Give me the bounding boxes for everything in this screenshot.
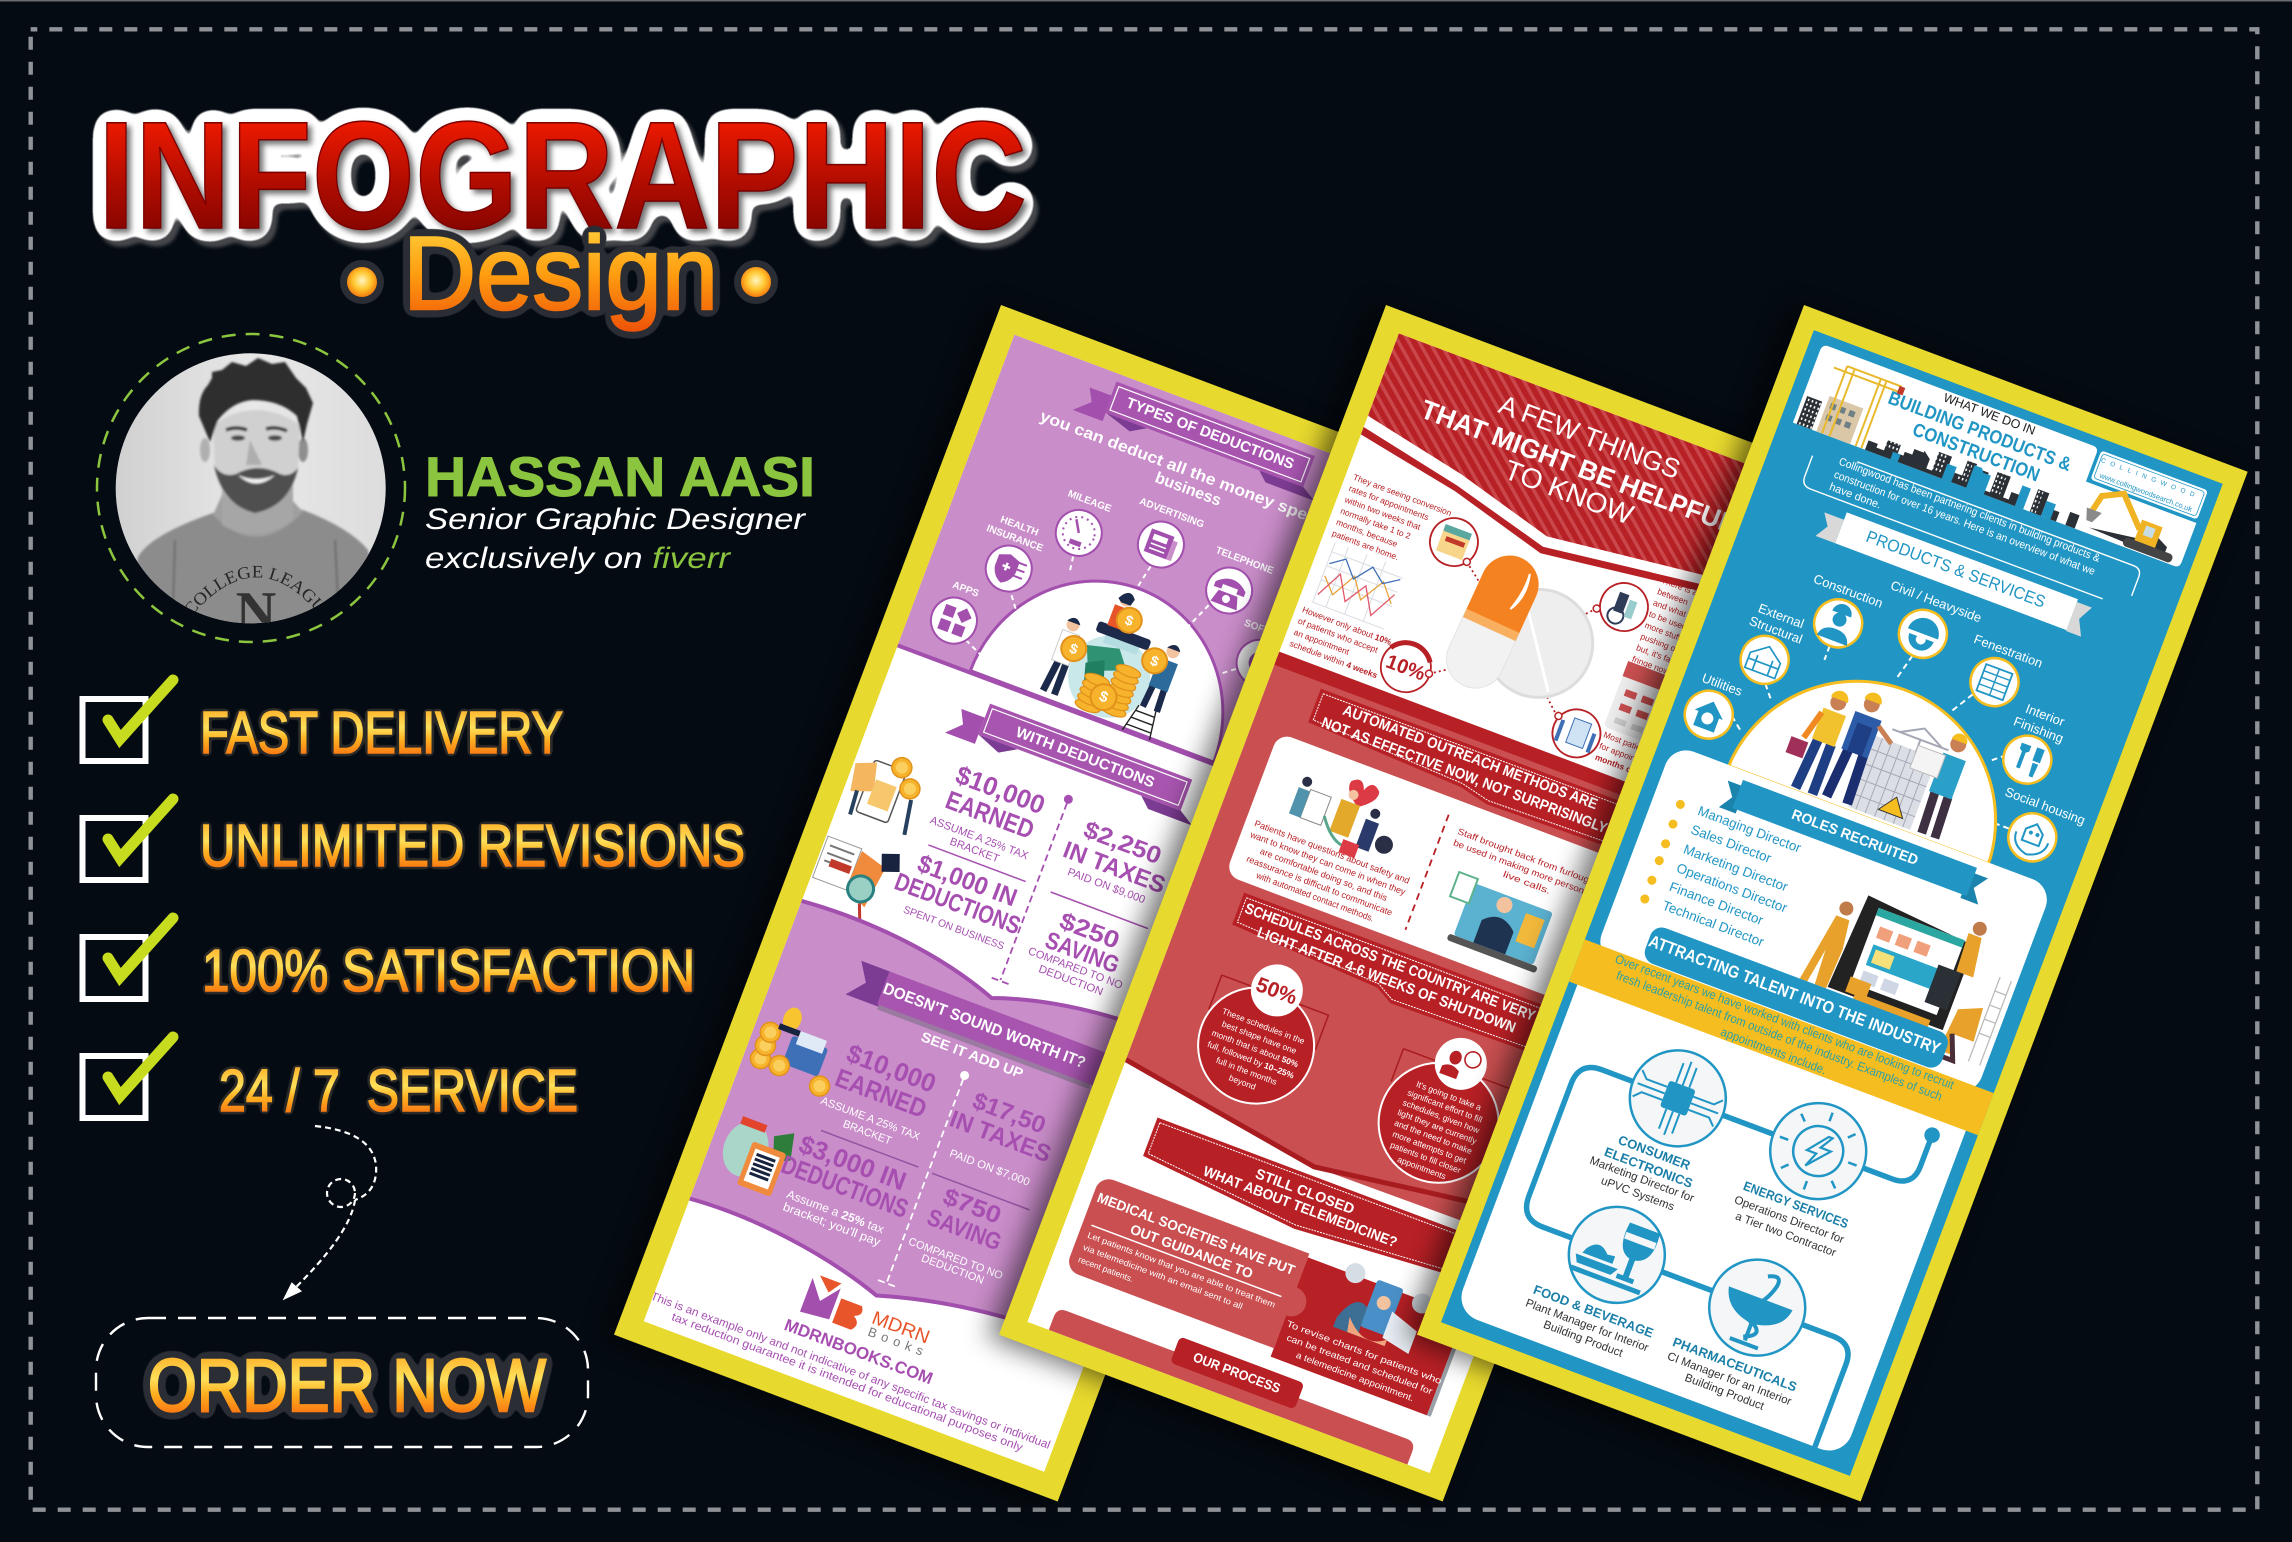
text: patients questions: Patients have questions about safety and [1253, 818, 1411, 886]
icon: fenestration [1964, 651, 2025, 713]
stat: 10 percent: 10% [1383, 651, 1428, 685]
illustration: coins and wallet [746, 999, 852, 1099]
ribbon: TYPES OF DEDUCTIONS [1124, 395, 1296, 473]
stats: taxes and saving [1019, 812, 1178, 1006]
text: right column notes [1594, 575, 1723, 784]
dashed divider [878, 1068, 975, 1286]
node label: pharmaceuticals: CI Manager for an Interior [1665, 1351, 1793, 1408]
icon: health insurance [984, 544, 1033, 593]
checklist [82, 680, 745, 1124]
disclaimer: This is an example only and not indicative of any specific tax savings or individual [649, 1291, 1052, 1452]
icon labels: APPS [951, 580, 981, 600]
stats: earned and deductions: BRACKET [948, 836, 1001, 865]
title: INFOGRAPHIC: INFOGRAPHIC [98, 90, 1027, 261]
icon: tablet [1469, 574, 1608, 713]
designer name and role: Senior Graphic Designer [425, 503, 806, 536]
node label: pharmaceuticals: Building Product [1683, 1372, 1766, 1413]
node label: food and beverage: Plant Manager for Interior [1524, 1297, 1650, 1355]
text: conversion rates: patients are home. [1331, 528, 1400, 562]
stats: taxes and saving: COMPARED TO NO [907, 1236, 1005, 1282]
banner: schedules: LIGHT AFTER 4-6 WEEKS OF SHUTDOWN [1255, 924, 1518, 1037]
banner: automated outreach: AUTOMATED OUTREACH METHODS ARE [1340, 702, 1600, 813]
hub semicircle [1729, 641, 2035, 864]
text: patients questions [1235, 818, 1412, 931]
text: only 10 percent: schedule within 4 weeks [1288, 638, 1379, 680]
node label: pharmaceuticals: PHARMACEUTICALS [1671, 1334, 1799, 1395]
icon labels: External [1756, 600, 1806, 631]
node label: energy services: ENERGY SERVICES [1741, 1178, 1851, 1231]
panel: medical societies: recent patients. [1077, 1254, 1135, 1284]
section: outreach [1114, 652, 1682, 1243]
stat circle: effort to fill schedules: light they are currently [1396, 1107, 1479, 1146]
illustration: money jar and people: $ [1123, 611, 1136, 629]
banner: schedules [1226, 893, 1598, 1074]
illustration: construction workers [1775, 671, 1977, 841]
stat circle: effort to fill schedules [1361, 1018, 1526, 1200]
illustration: money jar and people [1040, 592, 1180, 740]
text: only 10 percent: of patients who accept [1297, 616, 1380, 655]
panel: medical societies: via telemedicine with an email sent to all [1082, 1242, 1244, 1311]
section: types of deductions: HEALTH [999, 514, 1040, 539]
icon: apps [930, 596, 978, 645]
text: staff furlough: Staff brought back from furlough can [1456, 826, 1614, 894]
banner: automated outreach: NOT AS EFFECTIVE NOW, NOT SURPRISINGLY [1319, 714, 1610, 837]
logo box: COLLINGWOOD [2100, 457, 2200, 500]
text: right column notes: but, it's far [1635, 642, 1675, 666]
stats: earned and deductions: $10,000 [952, 759, 1049, 820]
stats: earned and deductions: $3,000 IN [795, 1129, 910, 1196]
stats: earned and deductions: $10,000 [843, 1038, 940, 1099]
stats: taxes and saving: PAID ON $9,000 [1066, 866, 1147, 906]
subtitle: you can deduct all the money spent on [1037, 408, 1350, 539]
stat circle: 50 percent: best shape have one [1221, 1019, 1298, 1056]
ribbon [844, 960, 1137, 1102]
panel: telemedicine dark [1271, 1246, 1472, 1417]
text: conversion rates: They are seeing conversion [1352, 472, 1453, 518]
text: right column notes: Most patients [1602, 729, 1653, 757]
panel: telemedicine dark: a telemedicine appointment. [1295, 1350, 1415, 1403]
stats: earned and deductions: DEDUCTIONS [891, 868, 1024, 940]
ribbon: WITH DEDUCTIONS [1013, 724, 1157, 791]
icon: civil helmet gear [1892, 603, 1954, 665]
text: conversion rates: months, because [1335, 517, 1399, 549]
node label: energy services [1727, 1177, 1852, 1260]
text: right column notes: Your schedule [1626, 665, 1680, 693]
order now button: ORDER NOW [148, 1344, 546, 1427]
stats: earned and deductions [894, 766, 1044, 949]
stats: taxes and saving: COMPARED TO NO [1026, 945, 1125, 992]
card 1: purple tax deductions infographic [614, 305, 1338, 1512]
text: right column notes: pushing out [1639, 631, 1684, 656]
node label: consumer electronics: CONSUMER [1616, 1132, 1693, 1173]
icon: external structural [1734, 629, 1796, 691]
icon: calendar circle [1423, 511, 1485, 573]
node label: energy services: a Tier two Contractor [1734, 1211, 1838, 1259]
text: conversion rates: normally take 1 to 2 [1339, 506, 1412, 541]
node label: consumer electronics: ELECTRONICS [1602, 1144, 1695, 1191]
node label: pharmaceuticals [1661, 1334, 1799, 1421]
list of roles: Managing Director [1696, 803, 1804, 856]
intro text: Collingwood has been partnering clients in building products & [1837, 456, 2102, 565]
text: only 10 percent: an appointment [1292, 627, 1351, 657]
node label: food and beverage: Building Product [1542, 1319, 1625, 1360]
section: types of deductions [897, 334, 1330, 766]
header with title: TO KNOW [1500, 454, 1638, 531]
icon: interior finishing [1996, 729, 2058, 791]
header with title: A FEW THINGS [1495, 389, 1684, 485]
ribbon: products and services [1815, 505, 2093, 637]
checkbox 1 [82, 680, 173, 761]
node: pharmaceuticals [1695, 1246, 1819, 1369]
text: staff furlough: be used in making more personalized [1452, 838, 1610, 905]
connectors [1728, 604, 2054, 832]
node label: food and beverage [1519, 1281, 1656, 1368]
text: conversion rates [1330, 472, 1453, 574]
section: see it add up [681, 899, 1203, 1373]
node label: consumer electronics [1583, 1125, 1707, 1219]
checkbox 2 [82, 799, 173, 880]
designer name and role: exclusively on fiverr [425, 542, 731, 575]
logo: MDRN Books [782, 1270, 952, 1388]
banner: still closed: WHAT ABOUT TELEMEDICINE? [1201, 1164, 1399, 1251]
icon labels: Fenestration [1972, 631, 2045, 671]
header with title [1344, 333, 1801, 631]
stat: 10 percent [1374, 635, 1440, 700]
stat circle: 50 percent [1181, 946, 1340, 1120]
stat circle: effort to fill schedules: more attempts to get [1391, 1129, 1468, 1166]
item: service: 24 / 7 SERVICE [219, 1058, 578, 1124]
stat circle: effort to fill schedules: significant effort to fill [1406, 1087, 1484, 1125]
icon labels: Utilities [1700, 670, 1745, 699]
icon: telephone [1205, 566, 1254, 615]
text: patients questions: want to know they can come in when they [1248, 829, 1407, 897]
icon labels: Structural [1747, 613, 1805, 647]
stat circle: 50 percent: beyond [1228, 1073, 1257, 1092]
icon labels: Civil / Heavyside [1889, 578, 1984, 625]
stats: earned and deductions: $1,000 IN [914, 850, 1021, 912]
text: conversion rates: rates for appointments [1348, 483, 1430, 522]
button: our process [1170, 1336, 1304, 1409]
intro text: have done. [1828, 481, 1883, 511]
ribbon: products and services: PRODUCTS & SERVICES [1863, 527, 2048, 612]
designer name and role [425, 445, 815, 575]
stat circle: effort to fill schedules: and the need to make [1393, 1118, 1474, 1156]
stats: earned and deductions: EARNED [831, 1062, 931, 1124]
panel: medical societies: MEDICAL SOCIETIES HAVE PUT [1095, 1189, 1298, 1278]
panel: lower white [1455, 960, 1975, 1457]
list of roles: Marketing Director [1681, 842, 1790, 895]
item: satisfaction: 100% SATISFACTION [202, 938, 695, 1004]
text: right column notes: months out [1594, 752, 1641, 778]
designer name and role: HASSAN AASI [425, 445, 815, 508]
list of roles [1638, 795, 1811, 953]
illustration: money jar and people: $ [1148, 652, 1161, 670]
node: energy services [1756, 1089, 1880, 1213]
text: only 10 percent [1288, 604, 1393, 681]
order now button [96, 1318, 588, 1447]
text: right column notes: more stuff [1643, 620, 1683, 643]
button: our process: OUR PROCESS [1191, 1350, 1282, 1396]
icon: utilities [1678, 684, 1740, 746]
ribbon: DOESN'T SOUND WORTH IT? [881, 980, 1088, 1072]
stats: earned and deductions: ASSUME A 25% TAX [928, 814, 1030, 862]
logo: MDRN Books: MDRNBOOKS.COM [782, 1315, 935, 1388]
stats: taxes and saving: SAVING [923, 1204, 1005, 1256]
header panel [1793, 344, 2209, 568]
section: types of deductions: SOFTWARE [1242, 618, 1300, 648]
header panel: CONSTRUCTION [1910, 420, 2042, 486]
logo: MDRN Books: MDRN [869, 1308, 932, 1348]
stats: taxes and saving: SAVING [1041, 927, 1123, 979]
list of roles: Sales Director [1689, 822, 1774, 866]
illustration: money jar and people: $ [1067, 640, 1080, 658]
section: types of deductions: ADVERTISING [1138, 496, 1206, 531]
card 2: red medical infographic [988, 301, 1830, 1507]
portrait photo with dashed ring [96, 332, 406, 644]
band: attracting talent: appointments include. [1719, 1025, 1828, 1077]
text: right column notes: fringe now [1631, 654, 1672, 677]
portrait photo with dashed ring: N [236, 581, 276, 643]
card 3: blue construction infographic [1406, 301, 2248, 1507]
stats: earned and deductions: BRACKET [841, 1118, 893, 1148]
band: attracting talent: ATTRACTING TALENT INTO THE INDUSTRY [1646, 931, 1944, 1058]
stat circle: effort to fill schedules: patients to fill closer [1389, 1140, 1462, 1175]
logo: MDRN Books: Books [866, 1324, 926, 1359]
stat circle: effort to fill schedules: schedules, given how [1401, 1097, 1482, 1136]
list of roles: Finance Director [1667, 879, 1766, 928]
text: patients questions: are comfortable doing so, and this [1259, 846, 1389, 903]
ribbon [1072, 382, 1315, 500]
ribbon: ROLES RECRUITED [1789, 807, 1920, 869]
stats: earned and deductions: EARNED [942, 784, 1038, 845]
item: unlimited revisions: UNLIMITED REVISIONS [200, 813, 745, 879]
node: food and beverage [1555, 1193, 1679, 1317]
stats: taxes and saving: $2,250 [1080, 816, 1165, 870]
panel: telemedicine dark: To revise charts for patients who [1285, 1319, 1443, 1386]
stat circle: effort to fill schedules: appointments [1396, 1154, 1447, 1181]
icon labels: Social housing [2003, 784, 2087, 828]
text: right column notes: for appointments [1598, 741, 1661, 772]
header with title: THAT MIGHT BE HELPFUL [1417, 394, 1740, 540]
stats: taxes and saving: DEDUCTION [920, 1252, 986, 1287]
stats: earned and deductions: SPENT ON BUSINESS [902, 904, 1006, 953]
timeline path [1481, 1005, 1939, 1450]
icon: construction worker [1807, 592, 1869, 654]
banner: schedules: SCHEDULES ACROSS THE COUNTRY ARE VERY [1242, 900, 1538, 1025]
icon: capsule [1437, 546, 1548, 697]
panel: roles recruited [1594, 744, 2053, 1097]
connector lines [966, 556, 1236, 674]
list of roles: Technical Director [1660, 898, 1767, 950]
panel: medical societies: OUT GUIDANCE TO [1128, 1221, 1255, 1282]
header panel: BUILDING PRODUCTS & [1885, 388, 2074, 476]
subtitle: Design with dots: Design [403, 216, 718, 332]
stat circle: effort to fill schedules: It's going to take a [1415, 1079, 1483, 1113]
stat circle: 50 percent: full in the months [1215, 1055, 1278, 1087]
arrow to order button [285, 1126, 376, 1298]
stat circle: 50 percent: 50% [1253, 973, 1301, 1010]
icon: social housing [2001, 806, 2063, 868]
checkbox 4 [82, 1037, 173, 1118]
icon: advertising newspaper [1136, 520, 1185, 569]
checkbox 3 [82, 918, 173, 999]
node label: consumer electronics: Marketing Director for [1588, 1155, 1696, 1205]
node label: food and beverage: FOOD & BEVERAGE [1531, 1282, 1656, 1341]
node: consumer electronics [1616, 1037, 1740, 1160]
text: patients questions: reassurance is difficult to communicate [1245, 854, 1394, 918]
banner: automated outreach [1303, 689, 1675, 868]
stats: earned and deductions [766, 1030, 957, 1254]
panel: telemedicine dark: can be treated and scheduled for [1285, 1332, 1434, 1396]
banner: still closed: STILL CLOSED [1253, 1166, 1356, 1218]
text: only 10 percent: However only about 10% [1301, 604, 1393, 647]
icon: wheelchair circle [1589, 575, 1655, 638]
item: fast delivery: FAST DELIVERY [200, 700, 563, 766]
icon: software [1236, 638, 1260, 682]
stat circle: 50 percent: These schedules in the [1221, 1006, 1306, 1046]
text: staff furlough [1448, 826, 1614, 916]
icon: red calendar [1604, 661, 1683, 747]
stats: taxes and saving: $250 [1056, 908, 1123, 955]
band: attracting talent [1569, 903, 2008, 1135]
illustration: boxes and phone [848, 756, 921, 836]
band: attracting talent: Over recent years we have worked with clients who are looking to recruit [1613, 952, 1956, 1092]
stats: taxes and saving: DEDUCTION [1037, 963, 1105, 998]
stats: taxes and saving: PAID ON $7,000 [948, 1148, 1031, 1189]
intro text: construction for over 16 years. Here is an overview of what we [1832, 469, 2097, 578]
stats: taxes and saving: $17,50 [969, 1088, 1049, 1140]
heading text: WHAT WE DO IN [1942, 391, 2037, 438]
panel: medical societies [1065, 1175, 1323, 1353]
icon: mileage gauge [1054, 508, 1103, 557]
icon labels: Finishing [2012, 714, 2066, 746]
connectors [1425, 560, 1598, 721]
disclaimer: tax reduction guarantee it is intended for educational purposes only [670, 1311, 1024, 1454]
footer band [1049, 1307, 1416, 1465]
text: staff furlough: live calls. [1502, 869, 1552, 896]
stats: earned and deductions: DEDUCTIONS [777, 1149, 912, 1224]
text: right column notes: to be used [1648, 609, 1689, 632]
illustration: crane and building [1797, 357, 1905, 455]
intro bracket lines [1801, 446, 2142, 608]
section: see it add up: SEE IT ADD UP [919, 1028, 1026, 1081]
icon labels: Interior [2024, 701, 2067, 729]
logo box: www.collingwoodsearch.co.uk [2098, 470, 2194, 514]
icon: doctors circle [1543, 702, 1607, 764]
section: types of deductions: INSURANCE [985, 523, 1045, 554]
stats: taxes and saving: IN TAXES [946, 1106, 1055, 1168]
node label: energy services: Operations Director for [1732, 1194, 1846, 1246]
panel: outreach methods [1225, 733, 1639, 1010]
stats: taxes and saving [899, 1082, 1063, 1293]
node label: consumer electronics: uPVC Systems [1599, 1175, 1676, 1214]
stat circle: 50 percent: month that is about 50% [1210, 1028, 1300, 1069]
stats: earned and deductions: bracket; you'll pay [781, 1200, 882, 1249]
illustration: recruiting website [1792, 869, 2027, 1070]
illustration: medical team [1282, 761, 1411, 869]
icon labels: Construction [1811, 571, 1885, 611]
dashed divider [992, 792, 1078, 984]
logo box [2090, 450, 2209, 520]
band: attracting talent: fresh leadership talent from outside of the industry. Examples of such [1614, 968, 1944, 1104]
ribbon [945, 704, 1192, 825]
ribbon [1718, 775, 1990, 905]
section: types of deductions: business [1153, 469, 1224, 510]
icon labels [1700, 527, 2141, 828]
illustration: forms and magnifier [812, 836, 900, 920]
list of roles: Operations Director [1674, 860, 1790, 916]
banner: still closed [1138, 1118, 1513, 1304]
stat circle: 50 percent: full, followed by 10–25% [1206, 1039, 1296, 1081]
section: with deductions [812, 704, 1192, 996]
section: types of deductions: MILEAGE [1066, 489, 1113, 515]
illustration: video consult [1326, 1260, 1437, 1357]
illustration: money jar and clipboard [712, 1111, 800, 1199]
stats: earned and deductions: ASSUME A 25% TAX [819, 1095, 922, 1143]
illustration: city skyline [1865, 425, 2084, 529]
illustration: video call laptop [1435, 872, 1559, 973]
illustration: money jar and people: $ [1097, 688, 1111, 707]
text: patients questions: with automated contact methods. [1254, 870, 1375, 924]
text: conversion rates: within two weeks that [1342, 494, 1423, 532]
stats: earned and deductions: Assume a 25% tax [785, 1187, 886, 1236]
section: types of deductions: TELEPHONE [1214, 545, 1275, 577]
illustration: excavator [2079, 483, 2188, 563]
stats: taxes and saving: $750 [939, 1183, 1005, 1230]
panel: medical societies: Let patients know that you are able to treat them [1086, 1230, 1277, 1310]
text: right column notes: between [1656, 586, 1690, 607]
text: right column notes: There is a big [1660, 575, 1712, 603]
line chart [1313, 542, 1406, 629]
text: right column notes: and what [1652, 597, 1688, 619]
stats: taxes and saving: IN TAXES [1059, 836, 1169, 899]
